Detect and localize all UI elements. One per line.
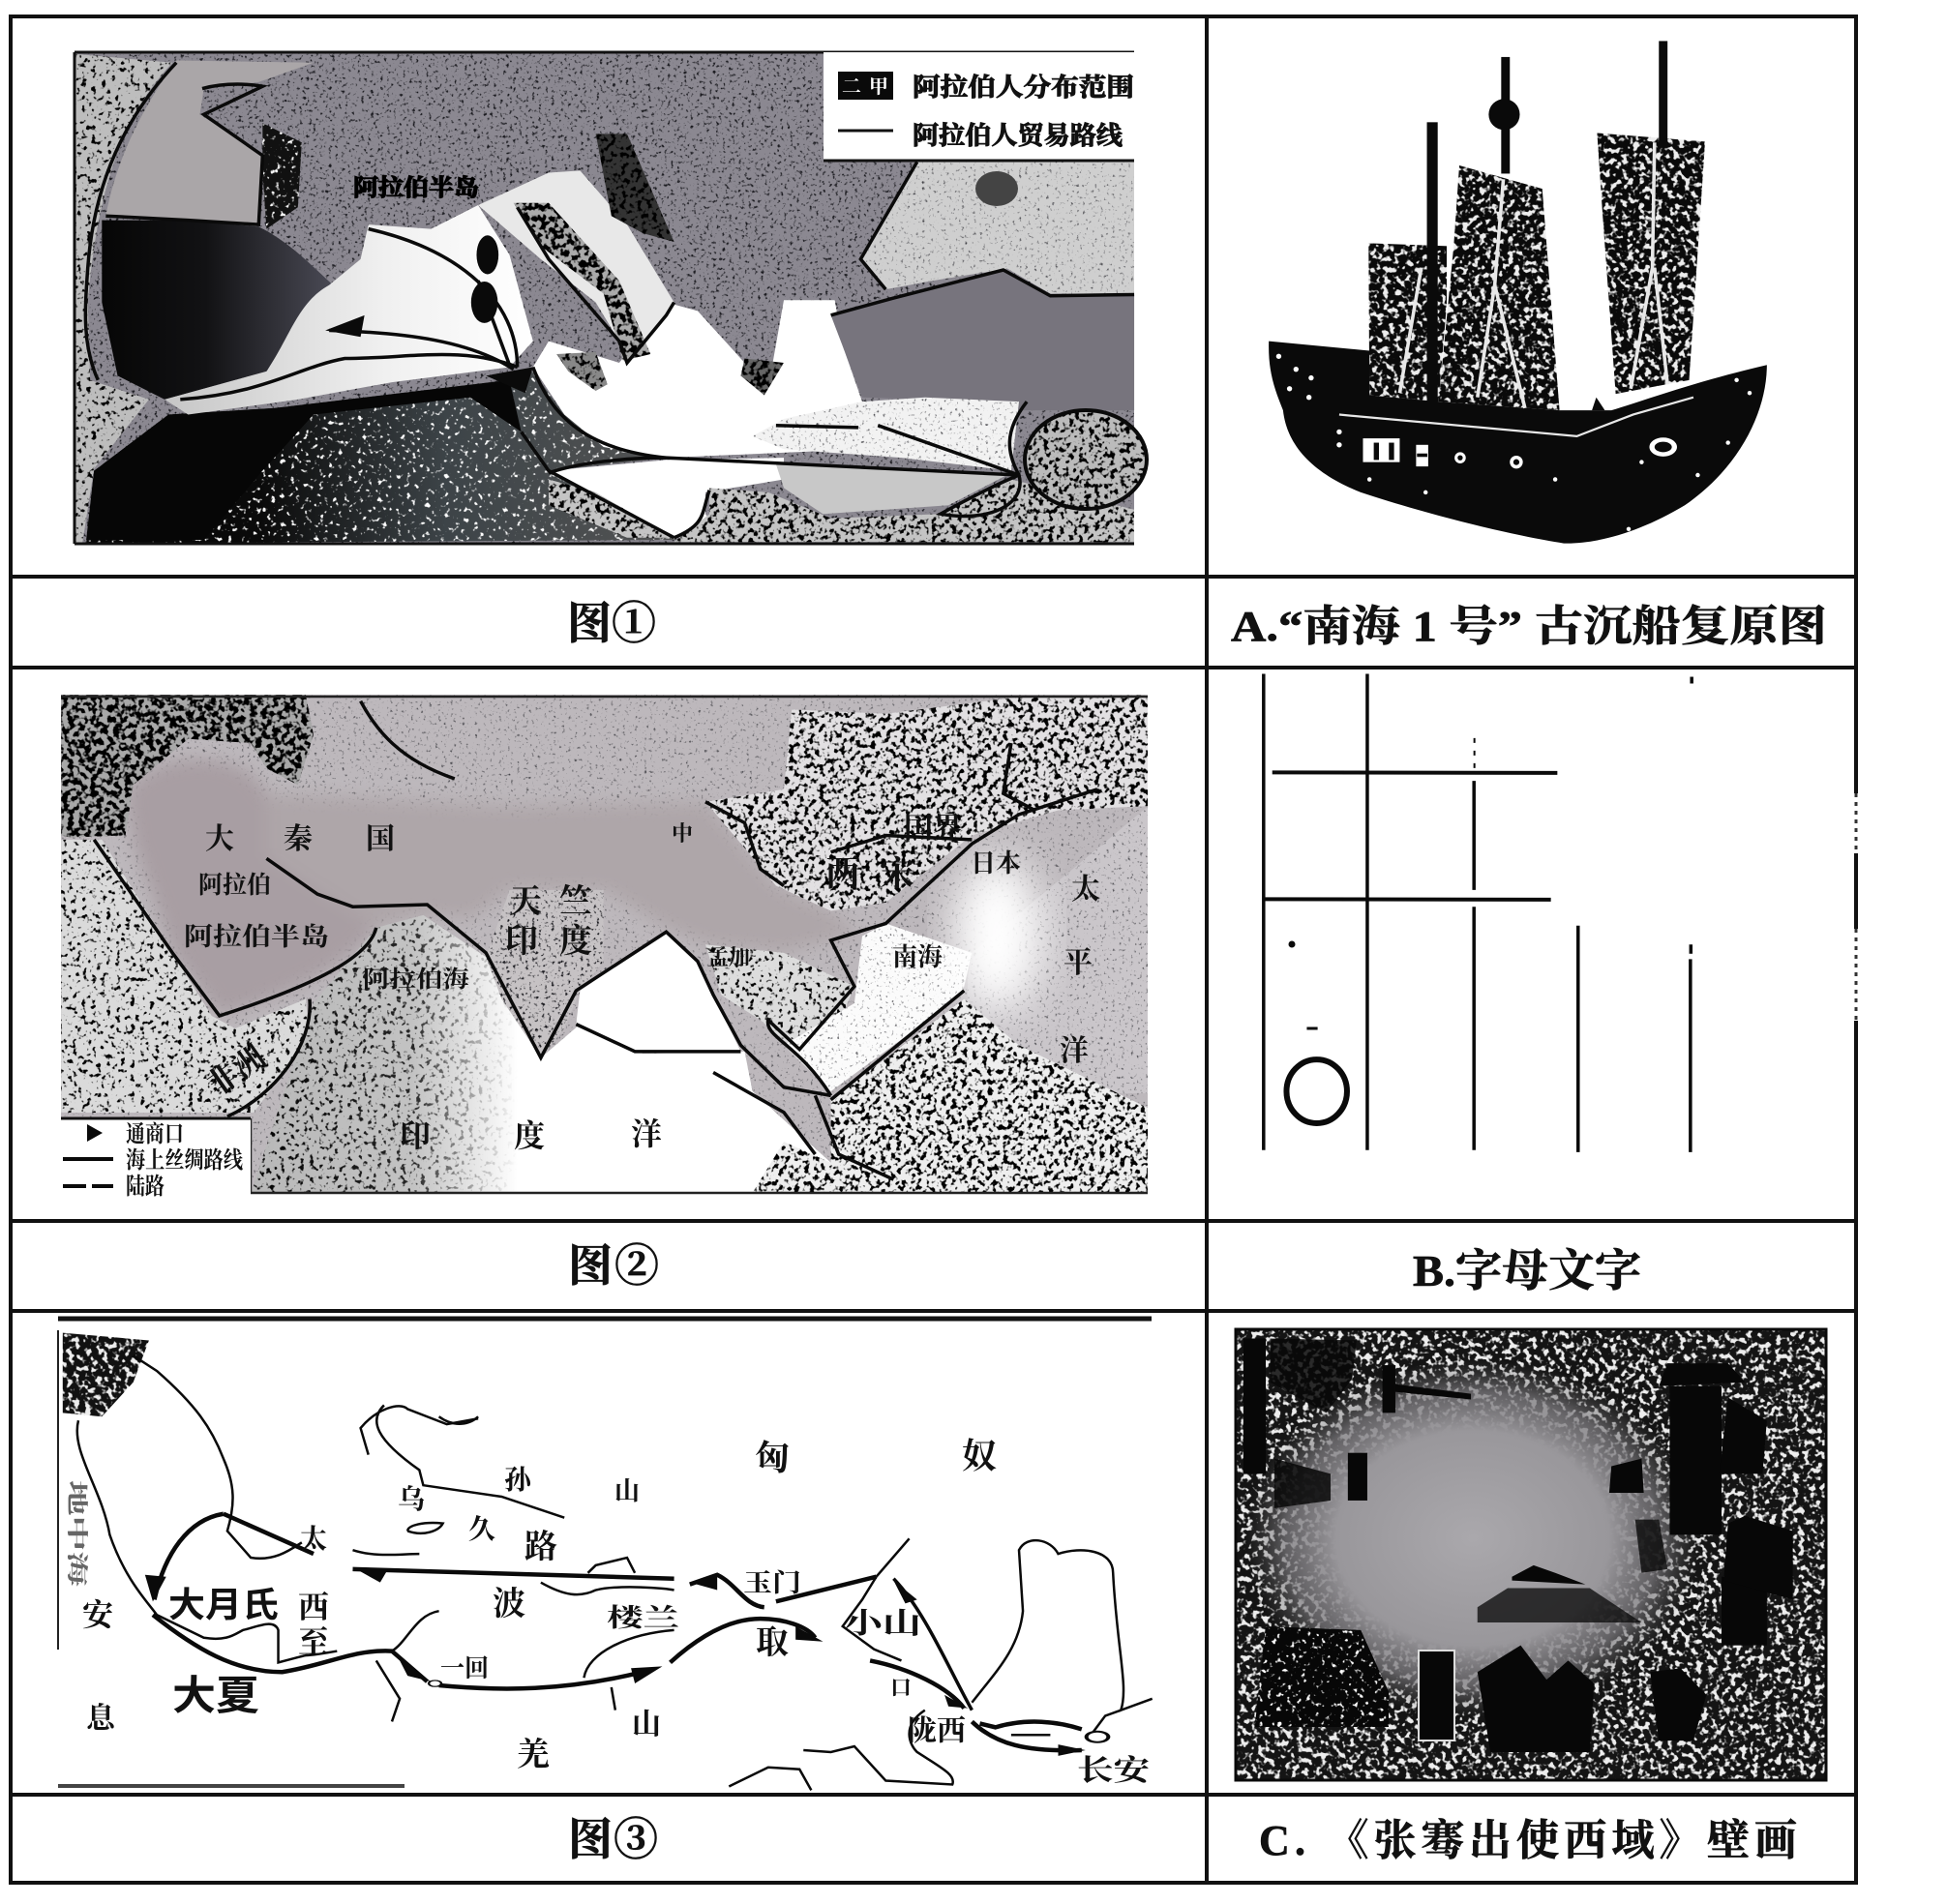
map labels: figure 3: 小山 bbox=[844, 1608, 921, 1640]
map labels: figure 3: 至 bbox=[298, 1624, 329, 1659]
map: island by route hub bbox=[556, 352, 608, 391]
map labels: figure 2: 太 bbox=[1071, 874, 1100, 906]
mural: lower left figure bbox=[1248, 1621, 1389, 1727]
map labels: figure 2: 度 bbox=[514, 1118, 545, 1153]
map: left textured strip bbox=[75, 54, 172, 542]
legend: figure 1: 阿拉伯人分布范围 bbox=[913, 74, 1134, 102]
map: light sea gulf bbox=[165, 205, 533, 415]
panel: ship illustration bbox=[1269, 41, 1767, 544]
map: route of Zhang Qian bbox=[153, 1514, 1082, 1750]
panel: figure 3 route of Zhang Qian bbox=[58, 1319, 1153, 1790]
caption: figure 3: 图③ bbox=[568, 1815, 658, 1864]
map: dark sea corner bbox=[62, 1333, 149, 1416]
map labels: figure 3: 西 bbox=[298, 1590, 329, 1624]
legend: figure 1: 阿拉伯人贸易路线 bbox=[913, 122, 1123, 150]
mural: outer frame bbox=[1236, 1329, 1826, 1780]
ship sails bbox=[1364, 131, 1708, 416]
map labels: figure 2: 日本 bbox=[971, 849, 1021, 878]
map labels: figure 2: 洋 bbox=[1060, 1035, 1089, 1067]
map: route lines bbox=[94, 701, 1097, 1179]
right border dotted gaps bbox=[1852, 793, 1860, 1021]
map labels: figure 2: 国界 bbox=[904, 813, 962, 845]
map labels: figure 3: 羌 bbox=[517, 1737, 550, 1773]
map labels: figure 2: 中 bbox=[672, 821, 693, 846]
legend: figure 2 bbox=[61, 1118, 251, 1200]
map: frame lines bbox=[75, 52, 1134, 544]
map labels: figure 3: 大月氏 bbox=[168, 1585, 279, 1624]
map labels: figure 2: 孟加 bbox=[707, 945, 750, 969]
panel: alphabet strokes bbox=[1264, 674, 1692, 1152]
map: central grey land bbox=[831, 270, 1134, 410]
map: circled China destination bbox=[1025, 410, 1147, 509]
map labels: figure 3: 玉门 bbox=[743, 1569, 801, 1597]
map labels: figure 2: 度 bbox=[559, 923, 592, 960]
map: South China Sea bbox=[784, 924, 972, 1091]
mural: white framed stele bbox=[1419, 1651, 1454, 1740]
map: frame lines bbox=[61, 697, 1148, 1193]
map: Southeast Asia bbox=[705, 944, 853, 1043]
panel: figure 2 map of sea routes bbox=[61, 695, 1148, 1200]
map labels: figure 3: 口 bbox=[890, 1676, 912, 1700]
alphabet: horizontal strokes bbox=[1264, 772, 1557, 900]
caption: figure 1: 图① bbox=[567, 599, 656, 648]
map labels: figure 3: 一回 bbox=[440, 1654, 489, 1682]
map: India bbox=[486, 890, 604, 1054]
map labels: figure 3: 山 bbox=[632, 1709, 661, 1740]
map: arrowheads bbox=[145, 1567, 1108, 1756]
map labels: figure 2: 阿拉伯海 bbox=[363, 967, 469, 993]
map: thin geographic lines bbox=[77, 1355, 1153, 1790]
map: Bay of Bengal white bbox=[576, 932, 740, 1052]
legend: figure 1 bbox=[824, 52, 1134, 161]
map labels: figure 2: 大 bbox=[205, 823, 234, 855]
map labels: figure 2: 天 bbox=[509, 884, 542, 920]
legend: figure 1: 二甲 bbox=[842, 75, 888, 98]
map labels: figure 3: 取 bbox=[756, 1625, 789, 1661]
map: lower grey land bbox=[776, 464, 1011, 514]
map labels: figure 3: 地中海 bbox=[65, 1480, 89, 1587]
caption: option A: A.“南海 1 号” 古沉船复原图 bbox=[1231, 603, 1827, 650]
map labels: figure 2 bbox=[184, 813, 1100, 1153]
map labels: figure 3: 匈 bbox=[755, 1439, 790, 1477]
map: East Asia textured bbox=[702, 695, 1148, 927]
map: peninsula dark texture bbox=[513, 203, 650, 361]
map labels: figure 3: 陇西 bbox=[908, 1715, 966, 1747]
map labels: figure 3: 久 bbox=[468, 1514, 495, 1545]
map: Indian Ocean fading to white bbox=[251, 915, 831, 1193]
map labels: figure 3 bbox=[65, 1437, 1152, 1787]
map labels: figure 2: 南海 bbox=[892, 943, 943, 971]
map: white glow near ocean bbox=[953, 856, 1040, 1011]
alphabet: small dot bbox=[1289, 940, 1295, 948]
map labels: figure 3: 乌 bbox=[398, 1484, 425, 1515]
map: black coastal band bbox=[86, 380, 522, 540]
map: right land bbox=[863, 163, 1134, 294]
map: peninsula band bbox=[478, 170, 674, 363]
mural: black blocks and figures bbox=[1243, 1338, 1793, 1752]
map: dark vertical label band bbox=[596, 134, 674, 242]
alphabet: ring bbox=[1286, 1059, 1347, 1123]
map base bbox=[61, 695, 1148, 1193]
caption: option B: B.字母文字 bbox=[1413, 1246, 1641, 1295]
panel: figure 1 map of trade routes bbox=[75, 52, 1147, 544]
map labels: figure 2: 非洲 bbox=[200, 1039, 271, 1103]
map: lower white bay bbox=[549, 458, 784, 538]
map labels: figure 2: 阿拉伯半岛 bbox=[184, 923, 329, 951]
map: island blobs along route bbox=[325, 235, 533, 393]
map labels: figure 2: 洋 bbox=[631, 1116, 662, 1151]
map: right land blocks bbox=[975, 171, 1018, 206]
alphabet: dot and dash bbox=[1306, 1026, 1318, 1029]
map labels: figure 3: 太 bbox=[300, 1524, 327, 1555]
map labels: figure 3: 安 bbox=[82, 1597, 115, 1632]
map: dark land bbox=[102, 221, 333, 400]
caption: option C: C. 《张骞出使西域》壁画 bbox=[1259, 1817, 1797, 1864]
map: top left textured land bbox=[61, 695, 322, 840]
map labels: figure 3: 波 bbox=[493, 1586, 525, 1622]
map: right ocean side bbox=[968, 803, 1148, 1093]
map labels: figure 3: 奴 bbox=[962, 1437, 997, 1475]
caption: figure 2: 图② bbox=[568, 1241, 659, 1291]
map labels: figure 3: 息 bbox=[86, 1703, 117, 1735]
map: upper left light sea bbox=[105, 60, 314, 224]
map labels: figure 3: 路 bbox=[524, 1529, 557, 1565]
map base: grey land bbox=[75, 52, 1134, 544]
map: sea routes bbox=[85, 63, 1134, 538]
map labels: figure 3: 楼兰 bbox=[607, 1603, 679, 1632]
map: south-east light land bbox=[753, 397, 1019, 470]
map labels: figure 2: 平 bbox=[1063, 947, 1093, 979]
map labels: figure 3: 山 bbox=[614, 1477, 640, 1505]
legend: figure 2: 陆路 bbox=[126, 1174, 165, 1200]
legend: figure 2: 通商口 bbox=[126, 1121, 184, 1147]
map labels: figure 2: 两 bbox=[825, 854, 860, 893]
map: Africa textured bbox=[61, 832, 322, 1113]
map: Indian Ocean texture bbox=[247, 909, 837, 1193]
map labels: figure 2: 阿拉伯 bbox=[198, 872, 271, 899]
map: south textured land bbox=[549, 480, 1134, 542]
panel: mural of Zhang Qian bbox=[1236, 1329, 1826, 1780]
map labels: figure 2: 印 bbox=[400, 1118, 431, 1153]
map frame lines bbox=[58, 1316, 1152, 1322]
mural: central light area bbox=[1245, 1359, 1700, 1717]
map label: peninsula name: 阿拉伯半岛 bbox=[353, 175, 479, 201]
map labels: figure 3: 孙 bbox=[504, 1465, 533, 1496]
map labels: figure 2: 竺 bbox=[559, 883, 592, 920]
map labels: figure 2: 秦 bbox=[284, 823, 313, 855]
map: lower right islands bbox=[745, 997, 1148, 1193]
alphabet: vertical strokes bbox=[1264, 674, 1692, 1152]
legend: figure 2: 海上丝绸路线 bbox=[126, 1147, 243, 1174]
map labels: figure 3: 大夏 bbox=[172, 1673, 259, 1718]
map labels: figure 2: 宋 bbox=[880, 854, 914, 893]
map labels: figure 2: 印 bbox=[505, 923, 538, 960]
map: white ocean bbox=[533, 300, 862, 458]
map: upper left coast band bbox=[262, 123, 302, 228]
map labels: figure 2: 国 bbox=[366, 823, 395, 855]
ship hull and masts bbox=[1269, 41, 1767, 544]
map: dark ocean south bbox=[75, 368, 694, 544]
map labels: figure 3: 长安 bbox=[1077, 1755, 1152, 1787]
map: small island dark bbox=[740, 358, 784, 395]
map: lilac smooth land bbox=[126, 759, 862, 1016]
mural base bbox=[1236, 1329, 1826, 1780]
